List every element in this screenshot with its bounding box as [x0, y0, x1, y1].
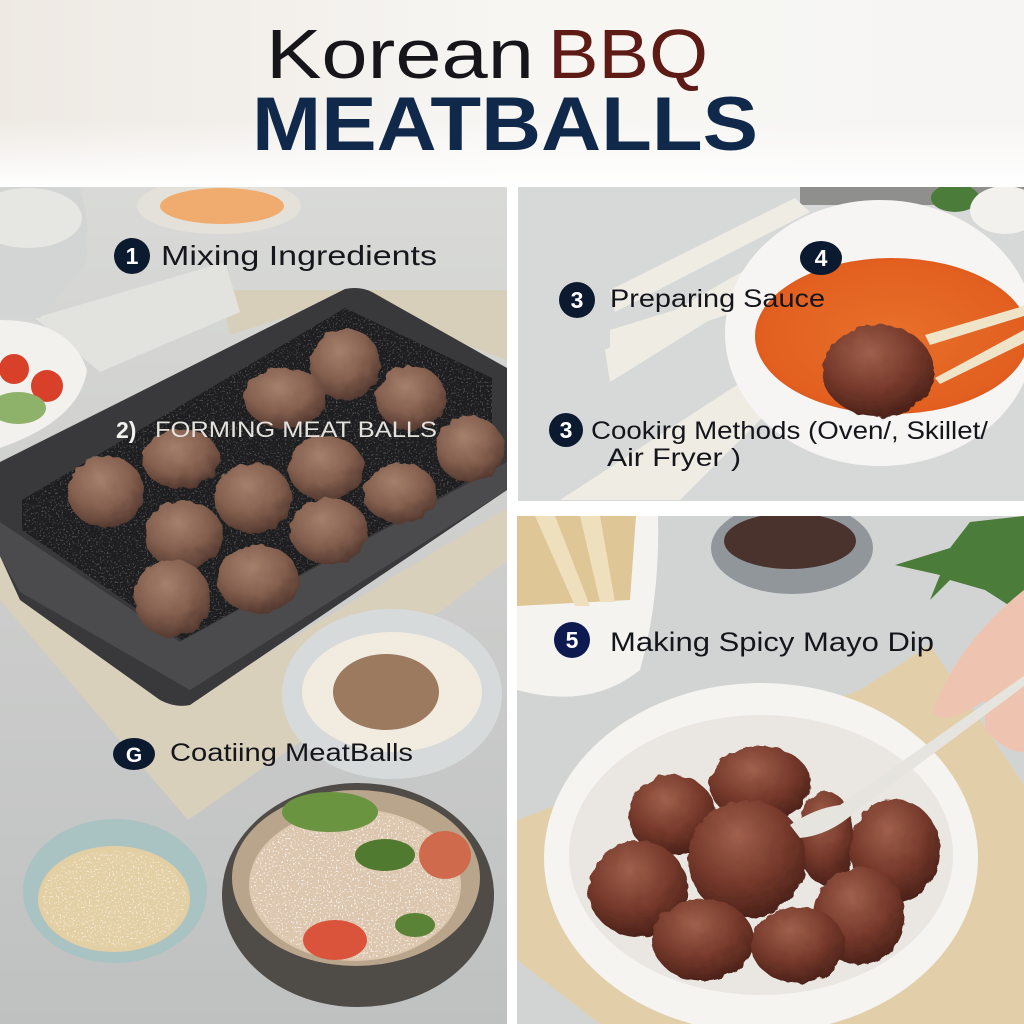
- step badge 4: 4: [815, 245, 828, 271]
- icon: white cup with sticks: [517, 516, 658, 697]
- icon: orange dish: [137, 187, 301, 234]
- large white bowl: [544, 683, 978, 1024]
- step label 3 sauce: Preparing Sauce: [610, 285, 825, 313]
- hand: [932, 590, 1024, 752]
- step label 5: [554, 622, 934, 658]
- corner shadow and leaf: [800, 184, 1024, 234]
- cutting board: [517, 645, 1024, 1024]
- step label 3 cooking: Cookirg Methods (Oven/, Skillet/: [591, 417, 988, 445]
- step label 3 sauce: 3: [571, 287, 583, 313]
- icon: breadcrumb bowl: [23, 819, 207, 963]
- step label 1: 1: [126, 243, 139, 269]
- step label 3 cooking: [549, 413, 988, 472]
- panel: bottom right, dip: [517, 502, 1024, 1024]
- title banner background: [0, 0, 1024, 187]
- title: [252, 15, 758, 167]
- icon: rice and vegetable bowl: [222, 783, 494, 1007]
- icon: herb leaves: [895, 516, 1024, 604]
- step label 1: Mixing Ingredients: [161, 240, 437, 271]
- title: MEATBALLS: [252, 82, 758, 167]
- step label coating: [113, 738, 413, 770]
- step label 3 cooking: Air Fryer ): [607, 444, 741, 472]
- bowl interior: [569, 715, 953, 995]
- dipped meatball: [822, 325, 934, 417]
- step label 2: 2): [116, 417, 136, 443]
- step label coating: G: [126, 744, 142, 767]
- baking tray: [0, 288, 507, 706]
- lower cloth: [0, 508, 507, 820]
- chopsticks: [925, 306, 1024, 384]
- noodles or sticks: [560, 198, 810, 500]
- icon: glass jar: [0, 187, 88, 318]
- sauce: [755, 258, 1024, 414]
- spoon: [790, 676, 1024, 838]
- panel: top right, sauce: [518, 184, 1024, 501]
- step label 2: FORMING MEAT BALLS: [155, 417, 437, 442]
- step label 1: [114, 238, 437, 274]
- step label 5: Making Spicy Mayo Dip: [610, 627, 934, 657]
- icon: glass bowl with patty: [282, 609, 502, 779]
- white napkin: [35, 262, 240, 372]
- meatballs on tray: [68, 328, 504, 637]
- step label coating: Coatiing MeatBalls: [170, 739, 413, 767]
- cooked meatballs: [588, 746, 940, 983]
- title: Korean: [266, 15, 534, 93]
- icon: salad bowl: [0, 320, 87, 448]
- panel: left, mixing and forming: [0, 178, 507, 1024]
- step label 3 cooking: 3: [560, 417, 572, 443]
- step label 5: 5: [566, 627, 579, 653]
- step label 3 sauce: [559, 282, 825, 318]
- white bowl: [725, 200, 1024, 466]
- title: BBQ: [548, 15, 708, 93]
- icon: peppercorn bowl: [711, 516, 873, 594]
- step badge 4: [800, 241, 842, 275]
- upper cloth: [220, 290, 507, 360]
